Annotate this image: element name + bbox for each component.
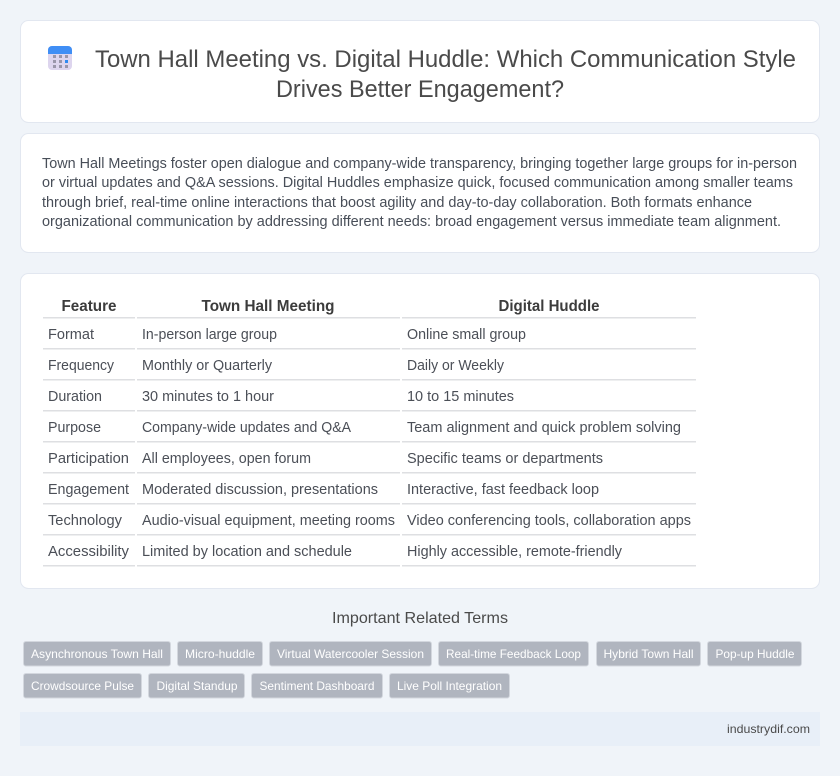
table row: Technology: Technology	[48, 513, 123, 529]
table row: Format	[43, 327, 696, 350]
related term tags: Pop-up Huddle	[716, 647, 795, 661]
title: Town Hall Meeting vs. Digital Huddle: Which Communication Style	[95, 46, 796, 73]
icon: calendar	[48, 46, 72, 70]
table row: Engagement: Moderated discussion, presentations	[142, 482, 378, 498]
panel: introduction text: Town Hall Meetings foster open dialogue and company-wide transparency, bringing together large groups for in-person	[42, 156, 797, 172]
table row: Technology: Video conferencing tools, collaboration apps	[407, 513, 691, 529]
heading: related terms: Important Related Terms	[332, 610, 508, 627]
table row: Frequency: Frequency	[48, 358, 115, 374]
related term tags: Micro-huddle	[185, 647, 255, 661]
table row: Frequency: Daily or Weekly	[407, 358, 505, 374]
table row: Participation: All employees, open forum	[142, 451, 311, 467]
table row: Duration: 10 to 15 minutes	[407, 389, 514, 405]
related term tags: Crowdsource Pulse	[31, 679, 134, 693]
table row: Accessibility: Limited by location and schedule	[142, 544, 352, 560]
table header row: Town Hall Meeting	[202, 298, 334, 315]
table row: Duration: Duration	[48, 389, 102, 405]
related term tags: Real-time Feedback Loop	[446, 647, 581, 661]
table row: Participation	[43, 451, 696, 474]
panel: comparison table	[20, 274, 820, 588]
title: Drives Better Engagement?	[276, 76, 564, 103]
related term tags: Hybrid Town Hall	[604, 647, 694, 661]
table row: Purpose	[43, 420, 696, 442]
table row: Accessibility	[43, 544, 696, 566]
related term tags: Asynchronous Town Hall	[31, 647, 163, 661]
table row: Purpose: Team alignment and quick problem solving	[407, 420, 681, 436]
table row: Engagement: Engagement	[48, 482, 129, 498]
table header row: Digital Huddle	[498, 298, 600, 315]
related term tags: Sentiment Dashboard	[260, 679, 374, 693]
related term tags: Virtual Watercooler Session	[277, 647, 424, 661]
panel: introduction text: organizational communication by addressing different needs: broad engagement versus immediate team alignment.	[42, 214, 781, 230]
table row: Engagement	[43, 482, 696, 504]
panel: title header	[20, 20, 820, 122]
table row: Purpose: Company-wide updates and Q&A	[142, 420, 351, 436]
table row: Participation: Specific teams or departments	[407, 451, 603, 467]
title	[95, 46, 796, 103]
table header row: Feature	[62, 298, 117, 315]
table row: Participation: Participation	[48, 451, 129, 467]
table row: Accessibility: Highly accessible, remote-friendly	[407, 544, 623, 560]
table row: Technology	[43, 513, 696, 536]
table row: Purpose: Purpose	[48, 420, 101, 436]
table row: Duration: 30 minutes to 1 hour	[142, 389, 274, 405]
table row: Accessibility: Accessibility	[48, 544, 130, 560]
table row: Engagement: Interactive, fast feedback loop	[407, 482, 599, 498]
table row: Format: In-person large group	[142, 327, 277, 343]
table row: Format: Online small group	[407, 327, 526, 343]
table row: Frequency	[43, 358, 696, 380]
panel: introduction text	[20, 134, 820, 252]
table row: Duration	[43, 389, 696, 412]
table row: Frequency: Monthly or Quarterly	[142, 358, 273, 374]
footer bar: industrydif.com	[727, 722, 810, 736]
panel: introduction text: through brief, real-time online interactions that boost agility and day-to-day collaboration. Both formats enhance	[42, 195, 752, 211]
related term tags	[24, 642, 802, 698]
related term tags: Live Poll Integration	[397, 679, 502, 693]
panel: introduction text: or virtual updates and Q&A sessions. Digital Huddles emphasize quick, focused communication among smaller teams	[42, 175, 793, 191]
table row: Technology: Audio-visual equipment, meeting rooms	[142, 513, 395, 529]
related term tags: Digital Standup	[156, 679, 238, 693]
table header row	[43, 298, 696, 318]
table row: Format: Format	[48, 327, 94, 343]
footer bar	[20, 712, 820, 746]
